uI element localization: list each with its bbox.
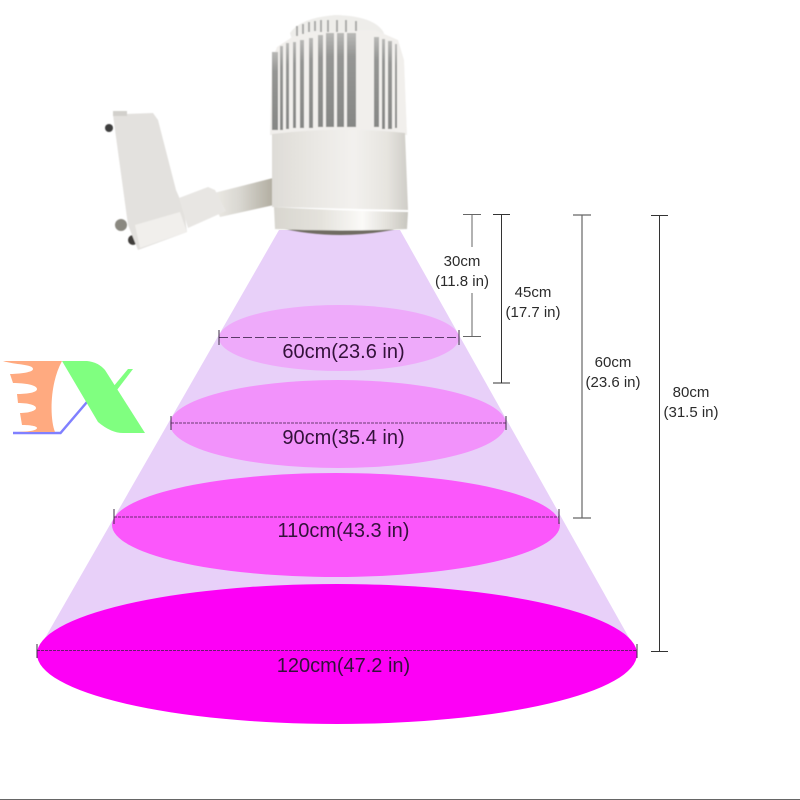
label: 80cm: (31.5 in) bbox=[663, 404, 719, 421]
icon: bracket arm bbox=[210, 178, 274, 217]
icon: lamp opening bbox=[276, 227, 406, 235]
bottom edge line bbox=[0, 799, 800, 800]
ellipse: 60cm beam bbox=[219, 305, 459, 371]
icon: lamp ring bbox=[274, 207, 408, 230]
label: 90cm width: 90cm(35.4 in) bbox=[282, 427, 405, 449]
label: 80cm: 80cm bbox=[673, 384, 709, 401]
logo bbox=[3, 361, 145, 433]
ellipse: 90cm beam bbox=[170, 380, 506, 468]
logo: green X bbox=[62, 361, 145, 433]
icon: bracket screws bbox=[105, 124, 138, 245]
label: 30cm: (11.8 in) bbox=[435, 273, 489, 290]
icon: mounting bracket bbox=[105, 111, 274, 250]
icon: bracket joint bbox=[179, 187, 226, 228]
label: 110cm width: 110cm(43.3 in) bbox=[278, 520, 409, 542]
label: 60cm: (23.6 in) bbox=[585, 374, 641, 391]
icon: heat sink bbox=[270, 20, 407, 135]
lamp bbox=[105, 15, 408, 250]
label: 30cm: 30cm bbox=[444, 253, 480, 270]
logo: orange comb bbox=[3, 361, 62, 432]
icon: lamp body bbox=[272, 130, 408, 210]
light cone bbox=[37, 230, 637, 652]
logo: blue stroke bbox=[13, 402, 87, 433]
label: 45cm: 45cm bbox=[515, 284, 551, 301]
icon: bracket plate bbox=[113, 113, 187, 250]
icon: lamp top cap bbox=[290, 15, 384, 46]
dimension: 60cm height bbox=[573, 215, 641, 518]
label: 45cm: (17.7 in) bbox=[505, 304, 561, 321]
ellipse: 110cm beam bbox=[112, 473, 560, 577]
ellipse: 120cm beam bbox=[37, 584, 637, 724]
dimension: 30cm height bbox=[435, 214, 489, 336]
icon: bracket hinge bbox=[135, 212, 187, 248]
label: 60cm: 60cm bbox=[595, 354, 631, 371]
label: 120cm width: 120cm(47.2 in) bbox=[277, 655, 410, 677]
dimension: 45cm height bbox=[493, 214, 561, 383]
label: 60cm width: 60cm(23.6 in) bbox=[282, 341, 405, 363]
dimension: 80cm height bbox=[651, 216, 719, 652]
